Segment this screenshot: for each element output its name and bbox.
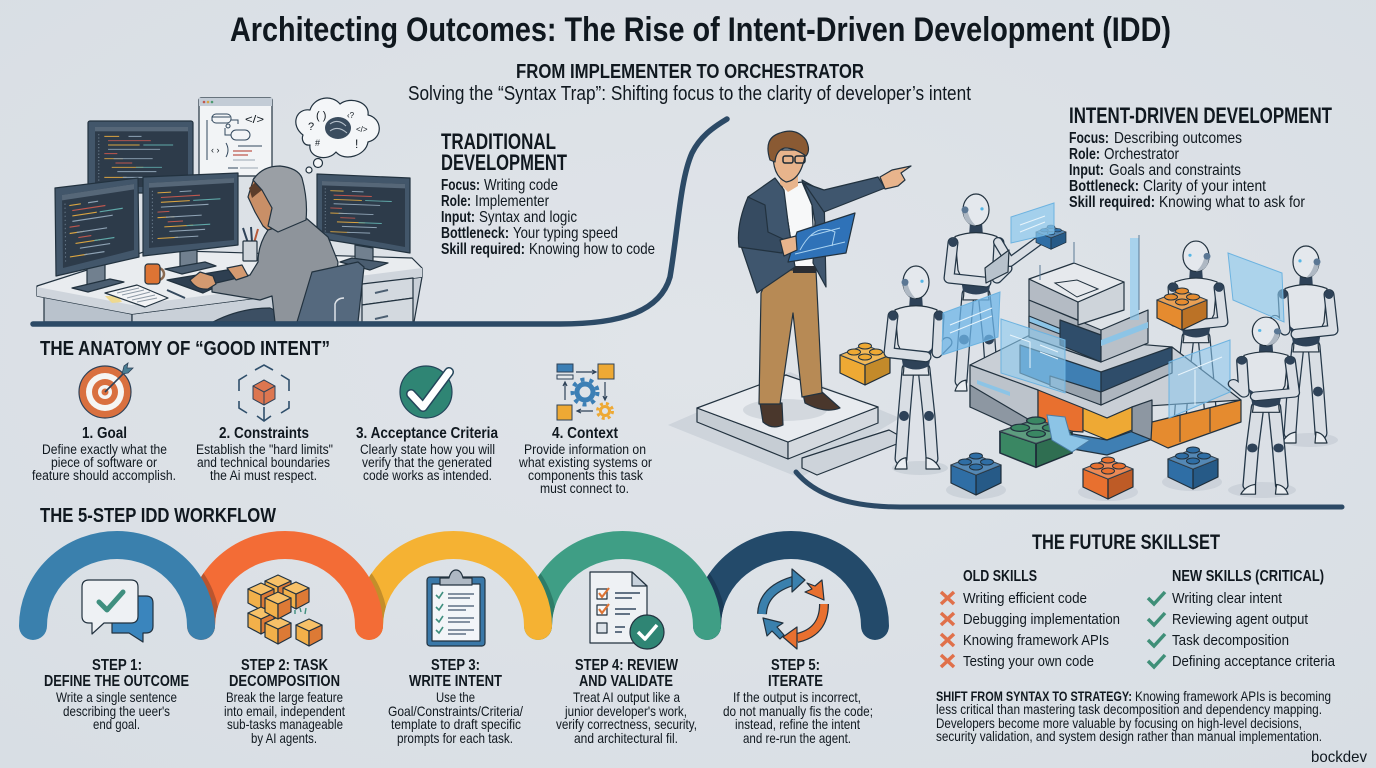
text block: shift from syntax to strategy: Knowing framework APIs is becoming xyxy=(1135,689,1331,704)
workflow arches xyxy=(33,545,875,626)
column: old skills: Writing efficient code xyxy=(963,590,1087,607)
shoes xyxy=(760,403,783,427)
step 3: Goal/Constraints/Criteria/ xyxy=(388,703,523,719)
step 5: instead, refine the intent xyxy=(735,716,860,732)
thought bubble: </> xyxy=(356,125,368,134)
translucent component xyxy=(1047,415,1090,452)
icon: check badge xyxy=(400,366,452,418)
trousers xyxy=(759,270,822,404)
step 2: STEP 2: TASK xyxy=(241,657,328,674)
shadow on arch 3 xyxy=(369,574,386,640)
step 5: do not manually fis the code; xyxy=(723,703,873,719)
text block: shift from syntax to strategy: less critical than mastering task decomposition and dependency mapping. xyxy=(936,702,1322,717)
step 5: STEP 5: xyxy=(771,657,820,674)
step 1: describing the ueer's xyxy=(63,703,170,719)
divider curve: orchestrator side xyxy=(796,472,1342,507)
text block: traditional development: Bottleneck: xyxy=(441,225,509,242)
step 3: WRITE INTENT xyxy=(409,673,502,690)
text block: shift from syntax to strategy: Developers become more valuable by focusing on high-level decisions, xyxy=(936,716,1302,731)
item: context xyxy=(518,364,652,496)
item: constraints: Establish the "hard limits" xyxy=(196,442,333,457)
thought bubble: # xyxy=(315,138,320,148)
icon: chat bubbles xyxy=(82,580,153,642)
panel: anatomy of good intent xyxy=(32,338,652,496)
text block: intent-driven development: Focus: xyxy=(1069,130,1109,147)
step 2: DECOMPOSITION xyxy=(229,673,340,690)
thought bubble: ? xyxy=(308,121,314,133)
base platform xyxy=(970,335,1241,455)
column: old skills: Testing your own code xyxy=(963,653,1094,670)
section heading: from implementer to orchestrator: Solving the “Syntax Trap”: Shifting focus to the clarity of developer’s intent xyxy=(408,83,971,105)
tablet xyxy=(788,213,855,262)
head xyxy=(780,175,798,192)
item: goal: Define exactly what the xyxy=(42,442,167,457)
holographic panels xyxy=(942,203,1284,418)
lego brick blue left xyxy=(951,453,1001,495)
lego brick green xyxy=(1000,417,1072,467)
text block: intent-driven development: Knowing what to ask for xyxy=(1159,194,1306,211)
item: context: what existing systems or xyxy=(518,455,652,470)
heading: THE ANATOMY OF “GOOD INTENT” xyxy=(40,338,330,360)
watermark: bockdev xyxy=(1311,749,1367,766)
right monitor xyxy=(317,174,410,270)
brick tower structure xyxy=(970,235,1241,455)
icon: iterate cycle xyxy=(762,569,824,649)
robot agent back middle xyxy=(948,194,1040,391)
ground shadows xyxy=(668,372,1338,501)
text block: intent-driven development: Skill required: xyxy=(1069,194,1155,211)
orchestrator figure xyxy=(738,131,911,427)
text block: shift from syntax to strategy: security validation, and system design rather than manual implementation. xyxy=(936,729,1322,744)
item: goal xyxy=(32,363,176,483)
holding arm xyxy=(738,197,785,253)
arch step 4 xyxy=(538,545,707,626)
item: goal: piece of software or xyxy=(51,455,157,470)
robot agent left xyxy=(888,266,947,469)
step 1: DEFINE THE OUTCOME xyxy=(44,673,189,690)
step 4: and architectural fil. xyxy=(574,730,678,746)
item: context: Provide information on xyxy=(524,442,646,457)
text block: traditional development: Syntax and logic xyxy=(479,209,577,226)
item: acceptance criteria: 3. Acceptance Criteria xyxy=(356,425,498,442)
step 3 xyxy=(388,570,523,746)
chair xyxy=(297,262,364,322)
back monitor xyxy=(88,121,193,193)
pen cup xyxy=(243,227,258,261)
thought bubble: ‹? xyxy=(347,111,355,120)
step 4: Treat AI output like a xyxy=(573,689,680,705)
item: context: components this task xyxy=(528,468,643,483)
thought bubble: ! xyxy=(355,137,358,151)
text block: traditional development: TRADITIONAL xyxy=(441,129,556,154)
column: old skills: Knowing framework APIs xyxy=(963,632,1109,649)
step 5: and re-run the agent. xyxy=(743,730,851,746)
tower lower tier xyxy=(1029,300,1148,362)
item: goal: feature should accomplish. xyxy=(32,468,176,483)
item: acceptance criteria: Clearly state how you will xyxy=(360,442,495,457)
step 1: Write a single sentence xyxy=(56,689,177,705)
icon: bounded cube xyxy=(239,365,289,421)
step 1: end goal. xyxy=(93,716,140,732)
text block: intent-driven development: Input: xyxy=(1069,162,1104,179)
icon: review document xyxy=(590,572,664,649)
panel: the future skillset xyxy=(936,531,1336,744)
lego brick blue right xyxy=(1168,447,1218,489)
column: new skills: Reviewing agent output xyxy=(1172,611,1309,628)
small blue brick held xyxy=(1036,225,1066,249)
lego brick held xyxy=(1157,288,1207,330)
column: old skills xyxy=(941,568,1120,670)
hooded programmer xyxy=(190,166,338,322)
text block: intent-driven development: Role: xyxy=(1069,146,1100,163)
shadow on arch 4 xyxy=(538,574,555,640)
text block: traditional development: Focus: xyxy=(441,177,480,194)
item: constraints xyxy=(196,365,333,483)
divider curve: traditional side xyxy=(33,119,727,324)
arch step 1 xyxy=(33,545,201,626)
shadow on arch 2 xyxy=(201,573,218,640)
step 3: template to draft specific xyxy=(391,716,521,732)
item: constraints: and technical boundaries xyxy=(197,455,330,470)
robot agent behind structure xyxy=(1165,241,1224,430)
text block: traditional development: Implementer xyxy=(475,193,550,210)
text block: shift from syntax to strategy xyxy=(936,689,1331,744)
step 2: by AI agents. xyxy=(251,730,317,746)
text block: traditional development xyxy=(441,129,655,258)
step 2: sub-tasks manageable xyxy=(227,716,343,732)
item: acceptance criteria: code works as intended. xyxy=(363,468,492,483)
item: context: must connect to. xyxy=(540,481,629,496)
keyboard xyxy=(167,269,240,293)
pointing arm xyxy=(804,177,885,212)
step 1 xyxy=(44,580,189,732)
icon: cube decomposition xyxy=(248,575,322,646)
text block: intent-driven development: Bottleneck: xyxy=(1069,178,1139,195)
robot agent far right xyxy=(1275,246,1334,443)
item: context: 4. Context xyxy=(552,425,619,442)
diagram sheet on wall xyxy=(199,98,272,176)
text block: shift from syntax to strategy: SHIFT FROM SYNTAX TO STRATEGY: xyxy=(936,689,1132,704)
step 5 xyxy=(723,569,873,746)
icon: clipboard checklist xyxy=(427,570,485,646)
section heading: from implementer to orchestrator xyxy=(408,61,971,105)
shirt xyxy=(782,182,815,268)
left monitor xyxy=(55,178,139,292)
lego brick orange front xyxy=(1083,457,1133,499)
step 4 xyxy=(556,572,697,746)
desk xyxy=(37,250,422,322)
step 4: verify correctness, security, xyxy=(556,716,697,732)
step 5: ITERATE xyxy=(768,673,823,690)
section heading: from implementer to orchestrator: FROM IMPLEMENTER TO ORCHESTRATOR xyxy=(516,61,864,83)
arch step 3 xyxy=(369,545,538,626)
thought bubble xyxy=(296,98,379,173)
text block: traditional development: Role: xyxy=(441,193,471,210)
step 3: Use the xyxy=(436,689,475,705)
illustration: traditional developer at desk xyxy=(37,98,422,322)
text block: traditional development: Your typing speed xyxy=(513,225,618,242)
heading: THE 5-STEP IDD WORKFLOW xyxy=(40,505,276,527)
item: acceptance criteria: verify that the generated xyxy=(362,455,492,470)
text block: traditional development: Skill required: xyxy=(441,241,525,258)
text block: intent-driven development: Describing outcomes xyxy=(1114,130,1242,147)
item: acceptance criteria xyxy=(356,366,498,483)
arch step 2 xyxy=(201,545,369,626)
shadow on arch 5 xyxy=(707,573,724,640)
papers and pen xyxy=(105,285,185,307)
step 3: STEP 3: xyxy=(431,657,480,674)
diagram sheet on wall: ‹ › xyxy=(211,145,220,155)
column: old skills: Debugging implementation xyxy=(963,611,1120,628)
step 3: prompts for each task. xyxy=(397,730,513,746)
arch step 5 xyxy=(707,545,875,626)
step 2: Break the large feature xyxy=(226,689,343,705)
step 5: If the output is incorrect, xyxy=(733,689,861,705)
column: new skills: Writing clear intent xyxy=(1172,590,1283,607)
step 4: junior developer's work, xyxy=(564,703,687,719)
item: goal: 1. Goal xyxy=(82,425,127,442)
text block: intent-driven development xyxy=(1069,103,1332,211)
light beams xyxy=(1040,235,1139,320)
text block: traditional development: Writing code xyxy=(484,177,558,194)
tower upper tier xyxy=(1029,263,1124,325)
column: old skills: OLD SKILLS xyxy=(963,568,1037,585)
center monitor xyxy=(143,173,238,274)
middle tier xyxy=(1020,345,1172,405)
text block: intent-driven development: Clarity of your intent xyxy=(1143,178,1266,195)
diagram sheet on wall: </> xyxy=(245,114,264,126)
column: new skills: Task decomposition xyxy=(1172,632,1289,649)
item: constraints: 2. Constraints xyxy=(219,425,309,442)
mug xyxy=(145,264,164,284)
text block: intent-driven development: Orchestrator xyxy=(1104,146,1180,163)
lego brick yellow xyxy=(840,343,890,385)
text block: traditional development: DEVELOPMENT xyxy=(441,150,567,175)
step 4: STEP 4: REVIEW xyxy=(575,657,679,674)
thought bubble: ( ) xyxy=(316,110,326,122)
column: new skills xyxy=(1148,568,1336,670)
step 1: STEP 1: xyxy=(92,657,142,674)
column: new skills: NEW SKILLS (CRITICAL) xyxy=(1172,568,1324,585)
platform under the orchestrator xyxy=(697,375,907,475)
text block: intent-driven development: Goals and constraints xyxy=(1109,162,1241,179)
title: Architecting Outcomes: The Rise of Intent-Driven Development (IDD) xyxy=(230,11,1171,49)
column: new skills: Defining acceptance criteria xyxy=(1172,653,1336,670)
jacket xyxy=(739,178,795,293)
item: constraints: the Ai must respect. xyxy=(210,468,317,483)
icon: connected systems xyxy=(557,364,614,420)
step 4: AND VALIDATE xyxy=(579,673,673,690)
heading: THE FUTURE SKILLSET xyxy=(1032,531,1220,554)
step 2 xyxy=(224,575,345,746)
text block: traditional development: Input: xyxy=(441,209,475,226)
icon: target xyxy=(79,363,133,418)
step 2: into email, independent xyxy=(224,703,345,719)
illustration: orchestrator and AI agents xyxy=(668,131,1338,501)
text block: traditional development: Knowing how to code xyxy=(529,241,655,258)
robot agent front right xyxy=(1233,317,1295,494)
panel: 5-step workflow xyxy=(33,505,875,746)
